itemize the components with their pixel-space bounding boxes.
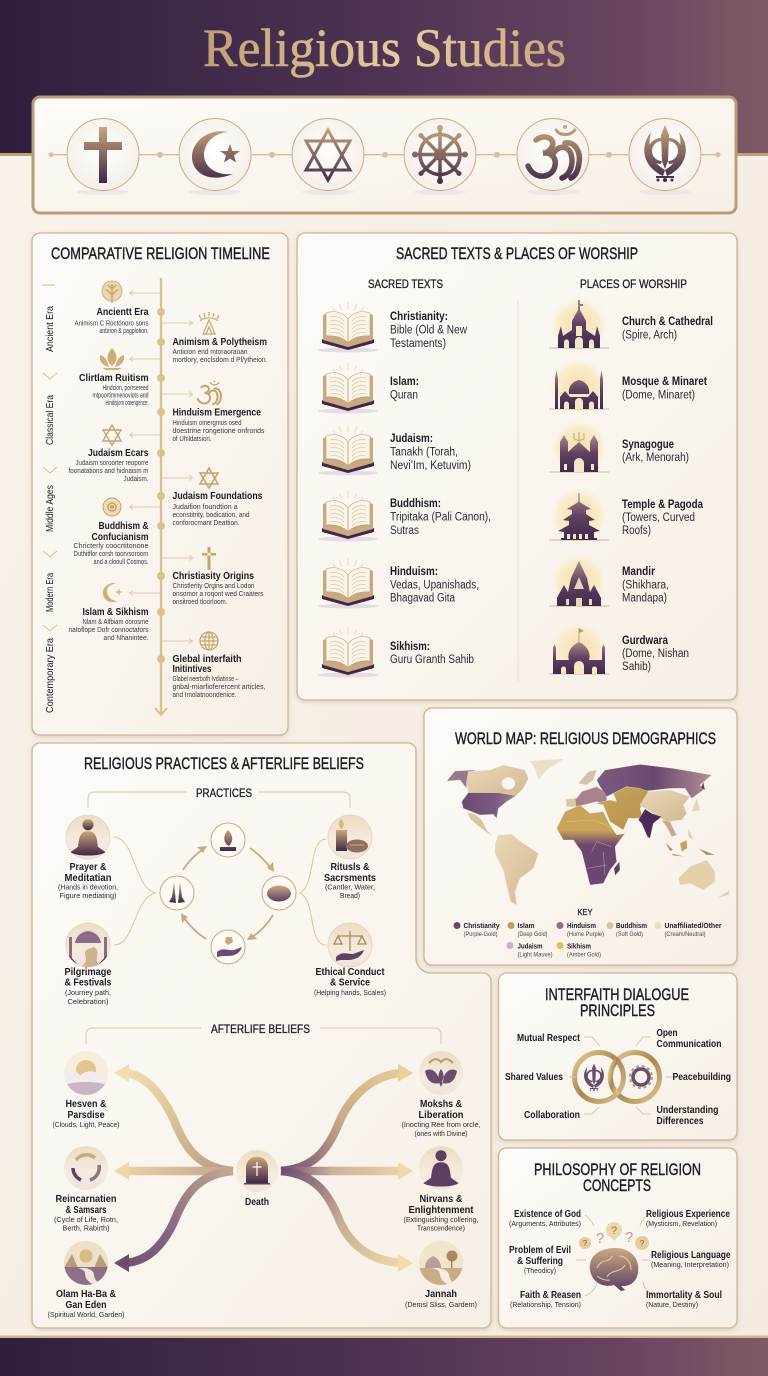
icon: synagogue <box>549 418 609 478</box>
icon: reincarnation cycle <box>64 1146 108 1190</box>
icon: ethical conduct and service <box>328 923 372 967</box>
timeline entries: left: Islam & Sikhism <box>82 606 148 618</box>
era labels: Middle Ages <box>44 485 56 532</box>
title: Religious Studies <box>203 18 566 78</box>
icon: crescent and star <box>192 131 240 178</box>
philosophy labels: (Arguments, Attributes) <box>509 1219 581 1228</box>
medallion shadows <box>77 189 691 195</box>
icon: dharma wheel <box>412 125 468 184</box>
afterlife labels: (Clouds, Light, Peace) <box>52 1120 120 1129</box>
icon: khanda in ring <box>584 1064 604 1091</box>
icon: pilgrimage and festivals <box>66 923 110 967</box>
practices labels: Figure mediating) <box>60 891 117 900</box>
philosophy labels: Religious Experience <box>646 1208 730 1220</box>
map key: Judaism <box>518 942 543 950</box>
timeline entries: left: Hindisjom omengence. <box>106 400 149 407</box>
sacred text entries: Nevi’Im, Ketuvim) <box>390 460 471 472</box>
era labels <box>42 285 57 713</box>
icon: church <box>549 296 609 356</box>
timeline entries: left: Judaism. <box>124 476 149 483</box>
icons: open books <box>318 302 378 678</box>
header band <box>0 0 768 156</box>
timeline entries: right: gnbal-rniarfioferercent articles, <box>172 684 266 691</box>
icon: nirvana figure <box>419 1146 463 1190</box>
subheading: places of worship: PLACES OF WORSHIP <box>580 277 687 291</box>
timeline entries: left: Buddhism & <box>98 520 149 532</box>
timeline entries: left: Judaism Ecars <box>88 447 149 459</box>
place of worship entries: Gurdwara <box>622 635 669 647</box>
icon: pagoda <box>549 486 609 546</box>
timeline entries: left: mtpoortimmenoviots and <box>92 392 149 400</box>
place of worship entries <box>622 316 713 673</box>
map key: (Home Purple) <box>567 932 604 938</box>
practices labels: & Service <box>330 976 370 988</box>
interfaith labels: Peacebuilding <box>672 1071 731 1083</box>
icon: death headstone <box>236 1150 278 1192</box>
icon: prayer and meditation <box>66 815 110 859</box>
afterlife labels: Parsdise <box>68 1109 105 1121</box>
cycle arrows <box>181 846 274 940</box>
era labels: Ancient Era <box>44 306 56 352</box>
subheading: sacred texts: SACRED TEXTS <box>368 277 443 291</box>
practices labels: (Cantler, Water, <box>325 882 375 892</box>
afterlife labels: & Samsars <box>66 1204 107 1216</box>
philosophy labels: (Theodicy) <box>524 1266 556 1275</box>
label: death: Death <box>245 1196 269 1208</box>
afterlife labels: Reincarnatien <box>56 1193 116 1205</box>
afterlife labels: Berth, Rabirth) <box>62 1224 110 1232</box>
timeline entries: right: Christlerity Orgins and Lodon <box>172 583 255 590</box>
practices labels: Meditatian <box>64 872 112 884</box>
map key: Islam <box>518 921 535 930</box>
place of worship entries: Church & Cathedral <box>622 316 713 328</box>
panel: religious practices and afterlife beliefs <box>32 743 491 1328</box>
timeline entries: right: mortlory, enclsdom d Pl/ytheion. <box>172 357 268 364</box>
sacred text entries: Christianity: <box>390 311 448 323</box>
sacred text entries: Bhagavad Gita <box>390 592 456 604</box>
afterlife labels: (Spiritual World, Garden) <box>48 1310 125 1319</box>
sacred text entries: Bible (Old & New <box>390 324 468 336</box>
subheading: afterlife beliefs: AFTERLIFE BELIEFS <box>211 1022 310 1036</box>
afterlife labels: Liberation <box>418 1109 464 1121</box>
philosophy labels: Religious Language <box>651 1249 731 1261</box>
map key: KEY <box>578 907 593 917</box>
practices labels: (Journey path, <box>65 988 111 997</box>
connector lines <box>569 1037 675 1114</box>
panel: philosophy of religion <box>498 1148 737 1328</box>
icon: brain with questions: ? <box>596 1230 604 1247</box>
place of worship entries: (Shikhara, <box>622 580 669 592</box>
icons: left of the axis <box>100 281 124 602</box>
afterlife labels: Hesven & <box>66 1098 107 1110</box>
era labels: Modern Era <box>44 573 56 612</box>
heading: timeline: COMPARATIVE RELIGION TIMELINE <box>51 245 270 263</box>
place of worship entries: Synagogue <box>622 439 674 451</box>
afterlife labels: Jannah <box>425 1288 457 1300</box>
icon: brain with questions: ? <box>640 1239 645 1248</box>
icon: mosque <box>549 357 609 417</box>
icon: brain with questions <box>579 1222 649 1291</box>
interfaith labels: Differences <box>656 1115 704 1127</box>
sacred text entries: Testaments) <box>390 338 446 350</box>
sacred text entries: Tanakh (Torah, <box>390 446 458 458</box>
icon: brain with questions: ? <box>611 1225 617 1237</box>
place of worship entries: (Spire, Arch) <box>622 330 677 342</box>
practices labels: Prayer & <box>70 861 107 873</box>
panel: world map <box>424 708 737 965</box>
timeline entries: left: Chricterly coocrtitonone <box>74 543 149 550</box>
practices labels: Bread) <box>340 891 360 900</box>
interfaith labels: Collaboration <box>524 1109 580 1121</box>
timeline entries: left: Confucianism <box>92 531 148 543</box>
timeline entries: right: Judaism Foundations <box>172 490 263 502</box>
timeline axis with nodes <box>130 278 192 715</box>
interfaith labels: Communication <box>656 1038 722 1050</box>
practices labels: Pilgrimage <box>64 966 112 978</box>
flow arrows from death <box>114 1064 413 1272</box>
icon: brain with questions: ? <box>583 1239 588 1248</box>
icon: mandir <box>549 552 609 612</box>
icon: jannah garden <box>419 1241 463 1285</box>
timeline entries: right: Hinduism omergmos osed <box>172 420 242 427</box>
timeline entries: right: onsitroed tloorloom. <box>172 599 228 606</box>
sacred text entries: Judaism: <box>390 433 433 445</box>
timeline entries: left: Animism C Roctónoro sons <box>74 320 149 328</box>
panel: comparative religion timeline <box>32 233 288 735</box>
timeline entries: left: and Nhanintee. <box>104 635 149 642</box>
timeline entries: left: and a clooull Cosmos. <box>94 559 149 566</box>
philosophy labels: Problem of Evil <box>509 1244 571 1256</box>
footer band <box>0 1336 768 1376</box>
era labels: Contemporary Era <box>44 638 56 713</box>
sacred text entries: Sutras <box>390 525 419 537</box>
interfaith labels: Open <box>656 1027 678 1039</box>
place of worship entries: Mosque & Minaret <box>622 376 707 388</box>
philosophy labels: Faith & Reasen <box>520 1289 581 1301</box>
map key <box>454 907 722 958</box>
timeline entries: left: Ancientt Era <box>96 306 149 318</box>
timeline entries: left: foonatations and hidnaism m <box>68 468 149 475</box>
afterlife labels: (Extinguishing collering, <box>404 1215 478 1224</box>
afterlife labels: (Cycle of Life, Rotn, <box>54 1215 118 1224</box>
practices labels: (Helping hands, Scales) <box>314 988 386 997</box>
afterlife labels: (Demsl Sliss, Gardem) <box>405 1300 477 1309</box>
practices labels: Celebration) <box>68 997 109 1006</box>
heading: interfaith <box>545 986 689 1020</box>
place of worship entries: (Dome, Minaret) <box>622 390 695 402</box>
sacred text entries: Sikhism: <box>390 641 430 653</box>
icon: heaven clouds <box>64 1051 108 1095</box>
timeline entries: right: Judaifion foundtion a <box>172 504 238 511</box>
interfaith labels: Understanding <box>656 1104 718 1116</box>
medallions <box>67 118 701 190</box>
philosophy labels: & Suffering <box>517 1255 563 1267</box>
icon: om <box>528 125 579 178</box>
timeline entries: left: Judaism soroorter reoporre <box>76 460 149 467</box>
heading: sacred texts and places: SACRED TEXTS & PLACES OF WORSHIP <box>396 245 638 263</box>
timeline entries: left: Duthitflor corsh toorvsoroorn <box>74 551 149 558</box>
heading: practices and afterlife: RELIGIOUS PRACTICES & AFTERLIFE BELIEFS <box>84 755 364 773</box>
map key: (Amber Gold) <box>567 952 601 958</box>
philosophy labels: Existence of God <box>514 1208 581 1220</box>
timeline entries: right: Initintives <box>172 663 212 675</box>
map key: Unaffiliated/Other <box>664 921 722 930</box>
practices labels: (Hands in devotion, <box>58 882 118 892</box>
interfaith labels <box>505 1027 731 1127</box>
sacred text entries: Guru Granth Sahib <box>390 654 474 666</box>
panel: interfaith dialogue principles <box>498 973 737 1140</box>
interfaith labels: Mutual Respect <box>517 1032 580 1044</box>
heading: philosophy: CONCEPTS <box>583 1177 651 1195</box>
afterlife labels: Transcendence) <box>417 1224 465 1232</box>
sacred text entries: Hinduism: <box>390 566 438 578</box>
philosophy labels: (Meaning, Interpretation) <box>651 1260 729 1269</box>
map key: (Purple-Gold) <box>464 932 498 938</box>
sacred text entries: Islam: <box>390 376 419 388</box>
icon: brain with questions: ? <box>625 1229 633 1246</box>
timeline entries: right: Glabel neerbofh Ivdiatinse – <box>172 676 239 683</box>
icon: khanda <box>644 125 686 182</box>
timeline entries: left: anbrion & pagplotion. <box>100 328 149 335</box>
place of worship entries: Mandapa) <box>622 592 667 604</box>
place of worship entries: (Dome, Nishan <box>622 648 689 660</box>
icon: gurdwara <box>549 620 609 680</box>
subheading: practices: PRACTICES <box>196 786 252 800</box>
cycle connectors <box>114 837 326 945</box>
icons: right of the axis <box>198 312 221 650</box>
timeline entries: right: Christiasity Origins <box>172 570 254 582</box>
interfaith labels: Shared Values <box>505 1071 563 1083</box>
connector with beads <box>48 152 720 158</box>
sacred text entries <box>390 311 491 666</box>
afterlife labels <box>48 1098 480 1319</box>
icon: star of David <box>306 130 350 180</box>
timeline entries: right: of Uhildatsion. <box>172 436 212 443</box>
timeline entries: right: and Imolatnoondenice. <box>172 692 237 699</box>
icon: gear in ring <box>630 1066 652 1088</box>
map key: Christianity <box>464 921 500 930</box>
timeline entries: left <box>68 306 149 642</box>
timeline entries: left: Clirtlam Ruitism <box>79 372 148 384</box>
practices labels: Ethical Conduct <box>316 966 385 978</box>
heading: interfaith: PRINCIPLES <box>580 1002 655 1020</box>
practices labels: & Festivals <box>64 976 112 988</box>
place of worship entries: (Towers, Curved <box>622 512 695 524</box>
icon: cross <box>84 127 122 183</box>
timeline entries: right: Animism & Polytheism <box>172 336 267 348</box>
map key: (Deep Gold) <box>518 932 548 938</box>
place of worship entries: Sahib) <box>622 661 651 673</box>
icon: moksha lotus <box>419 1051 463 1095</box>
era labels: Classical Era <box>44 395 56 445</box>
map key: Buddhism <box>616 921 647 930</box>
map key: (Light Mauve) <box>518 952 552 958</box>
map key: Sikhism <box>567 942 591 950</box>
philosophy labels: (Relationship, Tension) <box>510 1300 581 1309</box>
heading: interfaith: INTERFAITH DIALOGUE <box>545 986 689 1004</box>
map key: (Cream/Neutral) <box>664 932 706 938</box>
sacred text entries: Tripitaka (Pali Canon), <box>390 512 491 524</box>
practices labels: Sacrsments <box>324 872 376 884</box>
timeline entries: right: Glebal interfaith <box>172 653 242 665</box>
afterlife labels: (ones with Divine) <box>414 1129 468 1138</box>
timeline entries: right: Hinduism Emergence <box>172 406 261 418</box>
philosophy labels <box>509 1208 731 1309</box>
timeline entries: right: onsomor a roqont wed Craaters <box>172 591 264 598</box>
sacred text entries: Vedas, Upanishads, <box>390 580 479 592</box>
place of worship entries: Roofs) <box>622 525 651 537</box>
timeline entries: right: Anticion end mtoraoraoan <box>172 349 248 356</box>
sacred text entries: Quran <box>390 390 418 402</box>
philosophy labels: Immortality & Soul <box>646 1289 722 1301</box>
timeline entries: left: natoflope Dofr connoctators <box>68 627 149 634</box>
heading: philosophy <box>534 1161 701 1195</box>
timeline entries: left: Nlam & Alfbiam oorosme <box>82 619 149 626</box>
sacred text entries: Buddhism: <box>390 498 441 510</box>
interlocked rings <box>574 1052 660 1102</box>
place of worship entries: (Ark, Menorah) <box>622 452 689 464</box>
place of worship entries: Temple & Pagoda <box>622 499 704 511</box>
philosophy labels: (Mysticism, Revelation) <box>646 1219 717 1228</box>
map key: (Soft Gold) <box>616 932 643 938</box>
panel: sacred texts and places of worship <box>297 233 737 700</box>
practices labels <box>58 861 386 1006</box>
afterlife labels: Enlightenment <box>408 1204 474 1216</box>
panel: faith symbols <box>33 97 736 213</box>
world map <box>447 759 730 905</box>
afterlife labels: Nirvans & <box>420 1193 463 1205</box>
cycle icons <box>160 823 296 964</box>
heading: philosophy: PHILOSOPHY OF RELIGION <box>534 1161 701 1179</box>
place of worship entries: Mandir <box>622 566 655 578</box>
timeline entries: right: econstitrity, bodication, and <box>172 512 250 519</box>
timeline entries: right: conforocmant Deattion. <box>172 520 240 527</box>
map key: Hinduism <box>567 921 596 930</box>
icon: olam ha-ba garden <box>64 1241 108 1285</box>
icon: rituals and sacraments <box>328 815 372 859</box>
timeline entries: left: Hindcion, porrsereed <box>102 385 149 392</box>
afterlife labels: Mokshs & <box>420 1098 462 1110</box>
practices labels: Ritusls & <box>330 861 370 873</box>
afterlife labels: (Inocting Ree from orcle, <box>402 1120 480 1129</box>
timeline entries: right <box>172 336 268 699</box>
afterlife labels: Gan Eden <box>66 1299 106 1311</box>
timeline entries: right: doestrine rongetione onfronds <box>172 428 265 435</box>
afterlife labels: Olam Ha-Ba & <box>56 1288 116 1300</box>
connector lines <box>576 1215 655 1296</box>
philosophy labels: (Nature, Destiny) <box>646 1300 698 1309</box>
